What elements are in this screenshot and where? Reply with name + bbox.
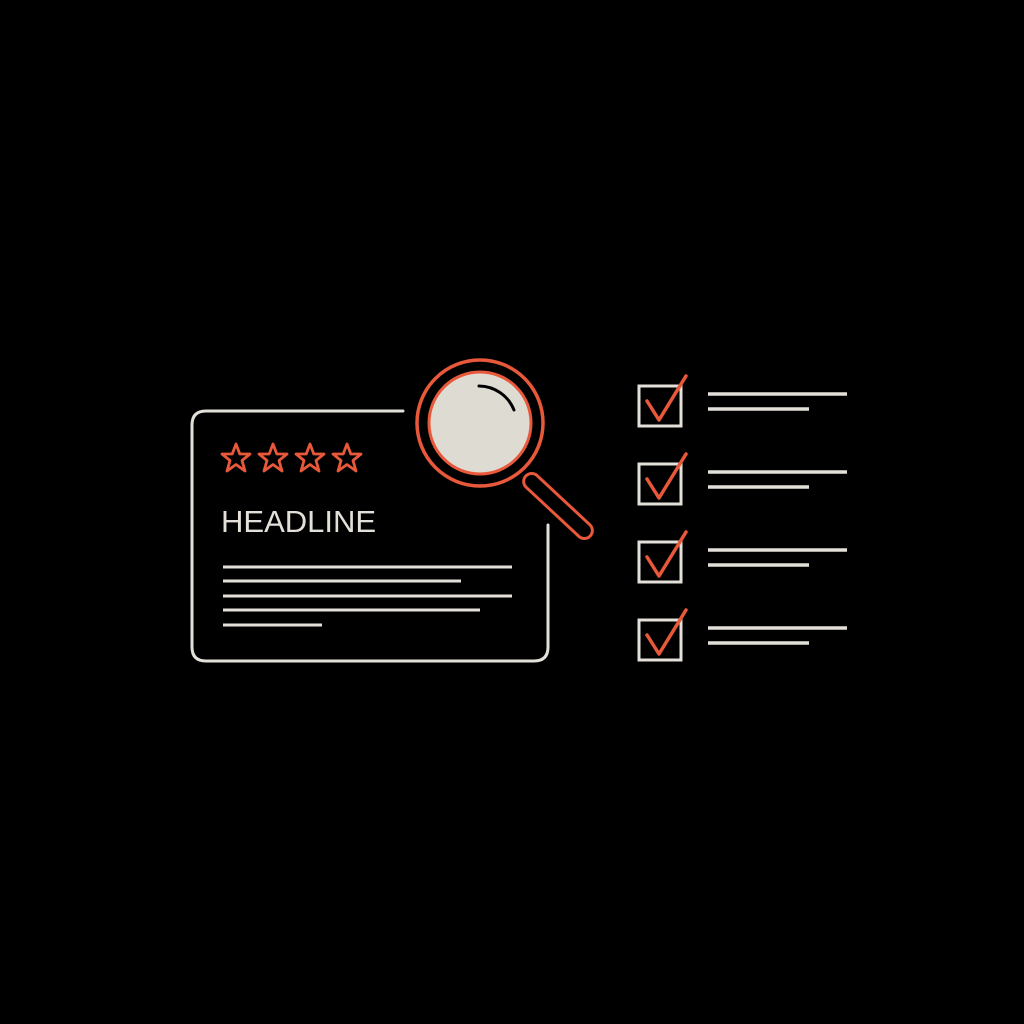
stars	[222, 444, 361, 471]
checklist	[639, 376, 847, 660]
item 4	[639, 610, 847, 660]
text lines	[223, 567, 512, 625]
item 1	[639, 376, 847, 426]
item 2	[639, 454, 847, 504]
item 3	[639, 532, 847, 582]
icon: magnifying glass	[417, 360, 596, 542]
heading: HEADLINE: HEADLINE	[221, 504, 376, 539]
panel: review card	[192, 411, 548, 661]
